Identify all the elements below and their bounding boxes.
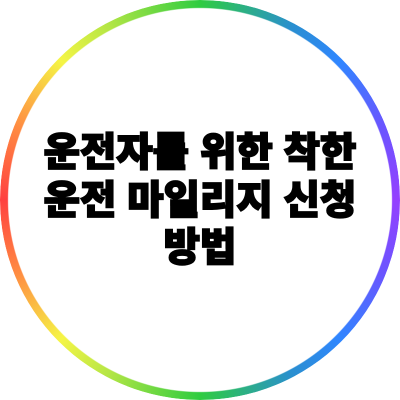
title: 방법 bbox=[164, 226, 236, 270]
title bbox=[44, 131, 356, 270]
title: 운전자를 위한 착한 bbox=[44, 131, 356, 175]
title: 운전 마일리지 신청 bbox=[44, 178, 356, 222]
